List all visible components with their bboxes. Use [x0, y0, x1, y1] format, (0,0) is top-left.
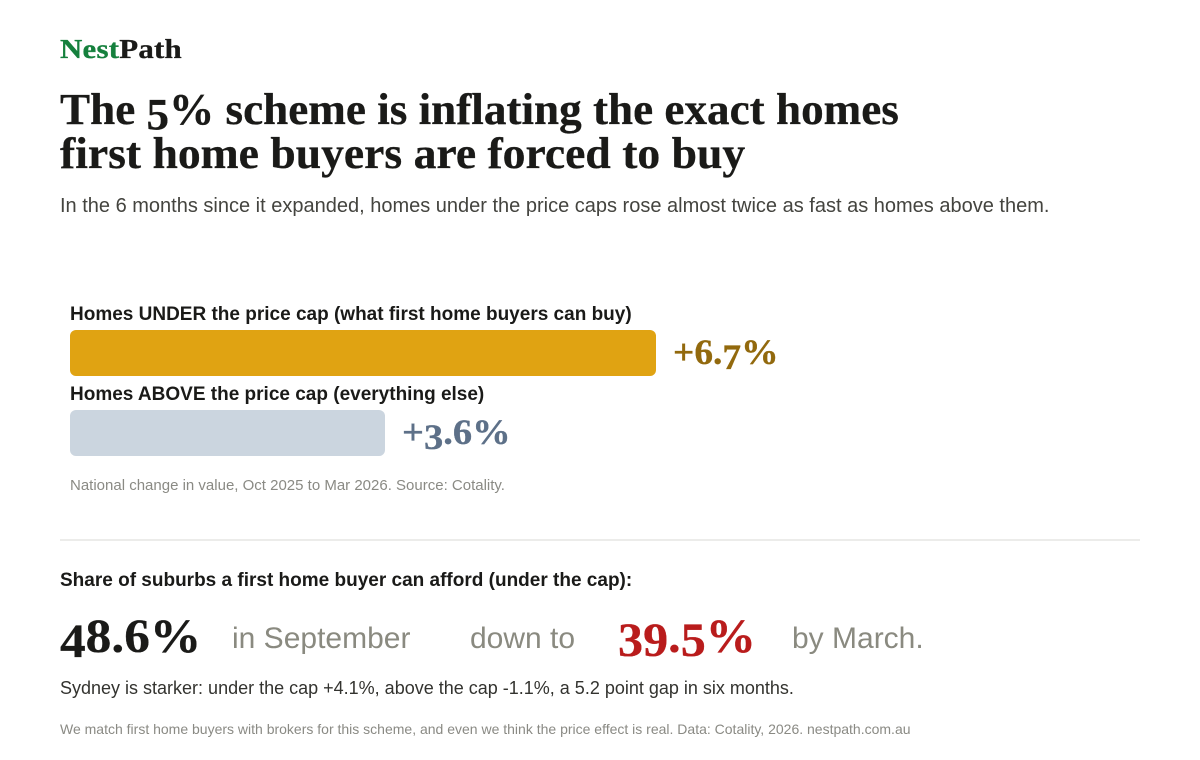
- bar: under cap: [70, 330, 656, 376]
- bar label: above cap: Homes ABOVE the price cap (everything else): [70, 384, 484, 405]
- value: above cap: +3.6%: [402, 412, 511, 457]
- subtitle: In the 6 months since it expanded, homes under the price caps rose almost twice as fast as homes above them.: [60, 195, 1049, 217]
- bar label: under cap: Homes UNDER the price cap (what first home buyers can buy): [70, 304, 632, 325]
- title: [60, 85, 899, 178]
- title line 1: The 5% scheme is inflating the exact homes: [60, 85, 899, 139]
- title line 2: first home buyers are forced to buy: [60, 129, 745, 178]
- section heading: Share of suburbs a first home buyer can afford (under the cap):: [60, 570, 632, 591]
- bar: above cap: [70, 410, 385, 456]
- Sydney note: Sydney is starker: under the cap +4.1%, above the cap -1.1%, a 5.2 point gap in six months.: [60, 678, 794, 698]
- stat: 48.6%: 48.6%: [60, 610, 201, 668]
- text: by March: by March.: [792, 622, 924, 655]
- brand logo: NestPath: [60, 34, 182, 64]
- text: down to: down to: [470, 622, 575, 655]
- stat: 39.5%: 39.5%: [618, 610, 756, 667]
- footer: We match first home buyers with brokers for this scheme, and even we think the price effect is real. Data: Cotality, 2026. nestpath.com.au: [60, 721, 911, 737]
- value: under cap: +6.7%: [673, 332, 779, 377]
- chart source note: National change in value, Oct 2025 to Mar 2026. Source: Cotality.: [70, 477, 505, 494]
- text: in September: in September: [232, 622, 410, 655]
